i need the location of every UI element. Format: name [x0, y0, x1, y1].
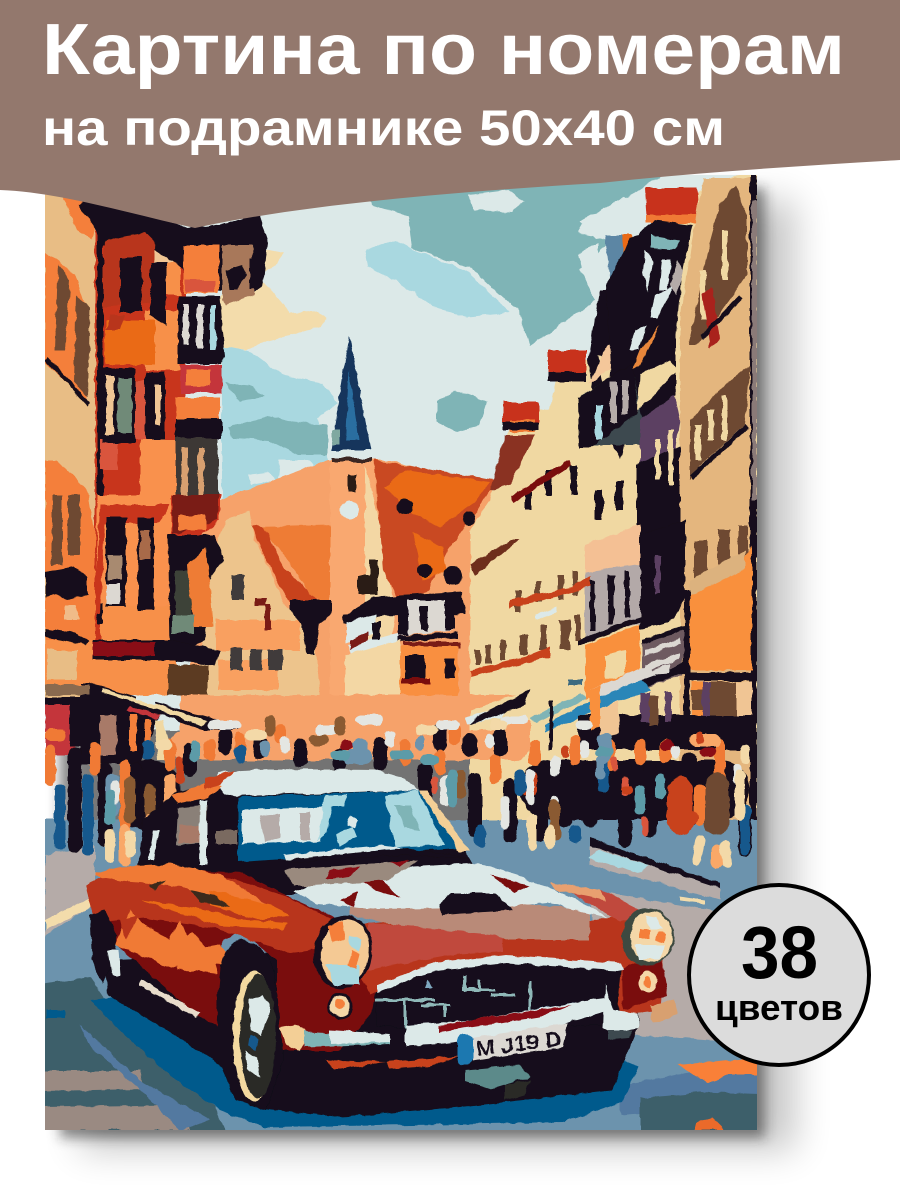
red vintage car	[85, 769, 678, 1117]
car bumper and plate	[280, 985, 678, 1100]
car hood	[283, 845, 668, 1015]
right headlight	[622, 908, 674, 966]
car wheel arch	[218, 940, 283, 1110]
car bumper and plate: M J19 D	[475, 1028, 563, 1061]
badge number: 38	[741, 911, 818, 994]
canvas drop shadow	[60, 188, 795, 1150]
header banner	[0, 0, 900, 228]
right buildings	[468, 175, 757, 820]
badge label: цветов	[715, 987, 843, 1028]
car wheel	[233, 970, 276, 1102]
car grille	[375, 955, 624, 1030]
painting: city street with red car	[40, 170, 780, 1140]
car roof and cabin	[138, 769, 493, 895]
distant church, tower and gabled houses	[190, 336, 494, 696]
left buildings	[40, 190, 268, 700]
crowd of people	[50, 720, 745, 863]
subtitle: на подрамнике 50x40 см	[42, 100, 725, 156]
left headlight	[312, 915, 372, 990]
fog lights	[327, 971, 657, 1019]
sky	[40, 170, 760, 730]
road	[40, 820, 760, 1140]
market awnings and street-level shops	[45, 663, 753, 764]
car shadow on road	[90, 986, 638, 1127]
badge: 38 colours	[689, 885, 869, 1065]
car body side	[85, 864, 382, 1051]
title: Картина по номерам	[42, 10, 845, 90]
car underbody	[105, 947, 640, 1117]
